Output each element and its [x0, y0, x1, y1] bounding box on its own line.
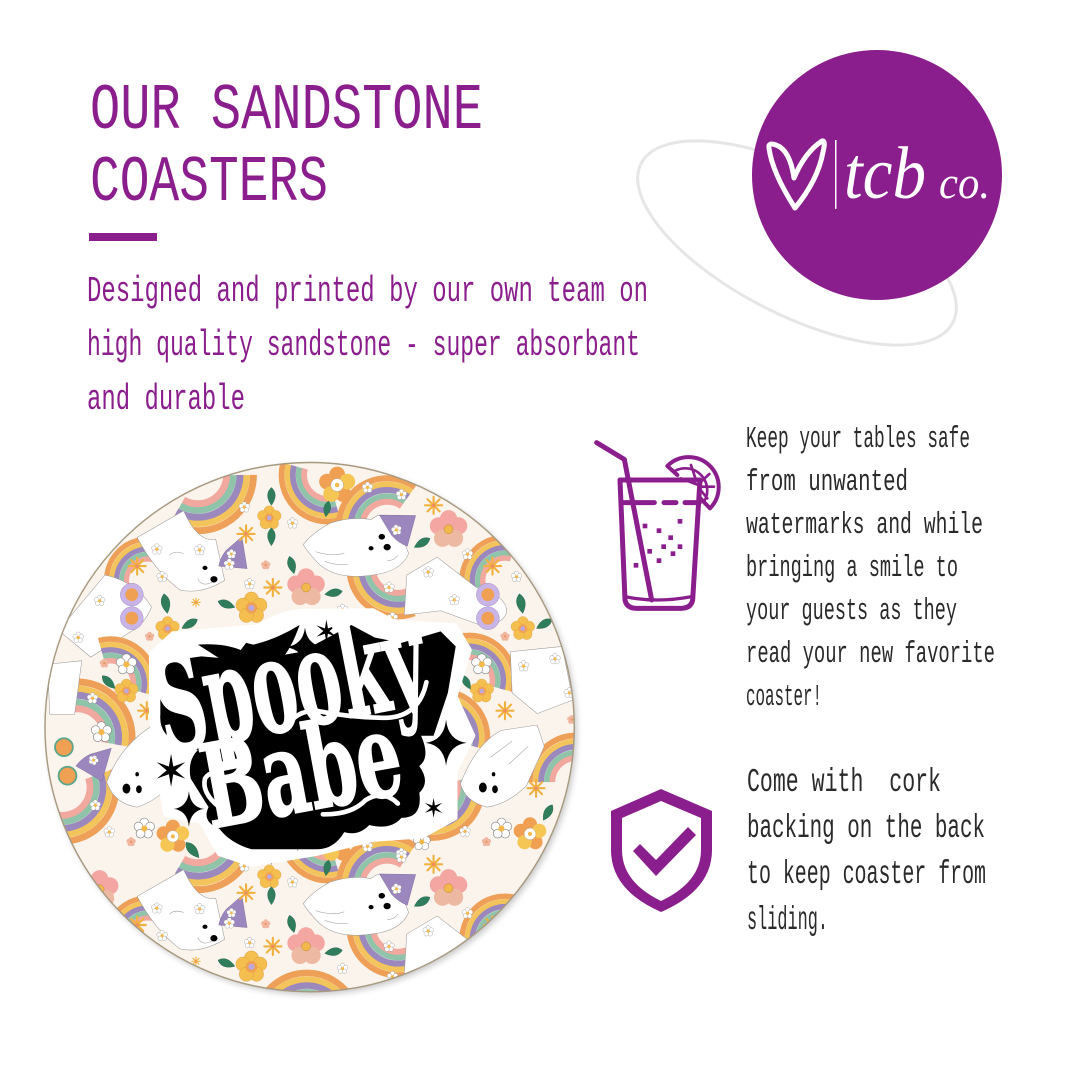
- description text: Designed and printed by our own team on: [87, 271, 648, 312]
- lettering: Spooky Babe: Babe: [191, 686, 412, 856]
- text block: cork backing: sliding.: [747, 902, 828, 939]
- lettering: Spooky Babe: Spooky: [142, 582, 440, 784]
- logo badge: [752, 50, 1002, 300]
- text block: cork backing: [747, 764, 986, 939]
- white sticker blob: [151, 611, 473, 864]
- icon: drink glass: [597, 443, 719, 608]
- logo wordmark: co.: [939, 157, 990, 208]
- description text: and durable: [87, 379, 245, 420]
- text block: tables: coaster!: [746, 680, 822, 715]
- black shadow of lettering: [160, 625, 456, 849]
- lettering swirls: [204, 682, 426, 814]
- text block: tables: from unwanted: [746, 465, 908, 500]
- description text: high quality sandstone - super absorbant: [87, 325, 640, 366]
- title: OUR SANDSTONE: [90, 74, 483, 148]
- icon: shield check: [611, 789, 712, 912]
- logo divider: [835, 140, 836, 209]
- icon: heart: [769, 141, 824, 208]
- coaster pattern: [44, 462, 575, 992]
- title underline bar: [89, 233, 157, 241]
- title: [90, 74, 483, 220]
- decorative orbit ring around logo: [608, 99, 986, 387]
- text block: tables: [746, 422, 995, 715]
- title: COASTERS: [90, 146, 328, 220]
- coaster: [43, 455, 605, 1016]
- text block: cork backing: Come with cork: [747, 764, 941, 801]
- bat: [198, 625, 300, 670]
- description text: [87, 271, 648, 420]
- lettering: Spooky Babe: [142, 582, 440, 856]
- logo wordmark: tcb: [844, 133, 926, 215]
- logo wordmark: [844, 133, 990, 215]
- stars: [155, 620, 467, 851]
